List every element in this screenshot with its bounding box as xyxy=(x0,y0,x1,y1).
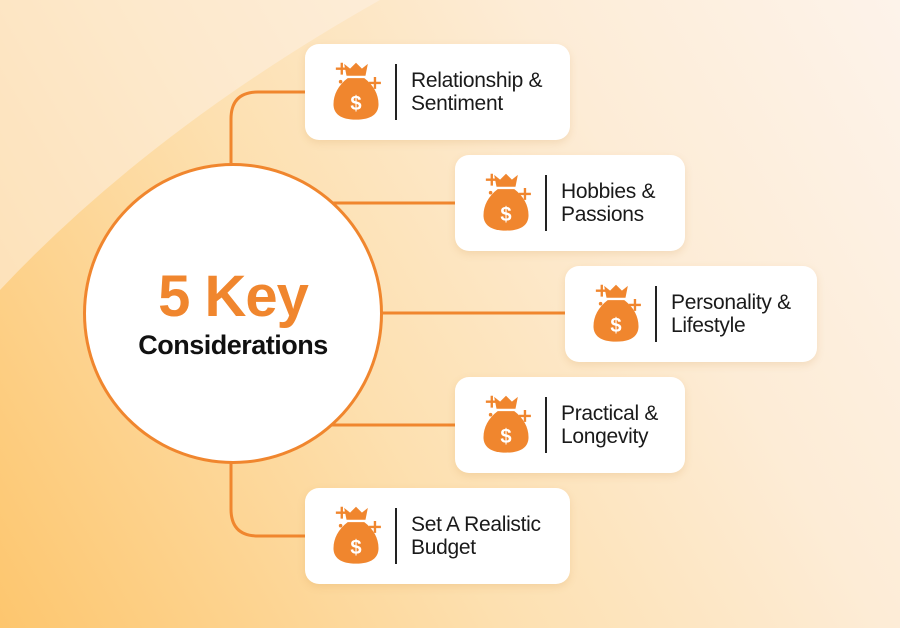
card 2 xyxy=(455,155,685,251)
icon: money bag: $ xyxy=(350,537,362,559)
title: 5 Key xyxy=(158,264,308,329)
label xyxy=(411,69,542,115)
subtitle: Considerations xyxy=(138,330,328,360)
label: Hobbies & xyxy=(561,180,655,203)
card 3 xyxy=(565,266,817,362)
label xyxy=(561,180,656,226)
icon: money bag xyxy=(334,62,381,120)
card 4 xyxy=(455,377,685,473)
label: Longevity xyxy=(561,425,648,448)
label: Sentiment xyxy=(411,92,503,115)
icon: money bag xyxy=(594,284,641,342)
icon: money bag: $ xyxy=(350,93,362,115)
label: Lifestyle xyxy=(671,314,745,337)
label: Passions xyxy=(561,203,644,226)
card 1 xyxy=(305,44,570,140)
label: Relationship & xyxy=(411,69,542,92)
label: Budget xyxy=(411,536,476,559)
icon: money bag: $ xyxy=(500,426,512,448)
icon: money bag: $ xyxy=(610,315,622,337)
label xyxy=(411,513,541,559)
icon: money bag xyxy=(334,506,381,564)
central circle xyxy=(83,163,383,464)
icon: money bag xyxy=(484,174,531,231)
icon: money bag: $ xyxy=(500,204,512,226)
label xyxy=(561,402,658,448)
label: Set A Realistic xyxy=(411,513,541,536)
card 5 xyxy=(305,488,570,584)
label xyxy=(671,291,791,337)
label: Practical & xyxy=(561,402,658,425)
icon: money bag xyxy=(484,396,531,453)
label: Personality & xyxy=(671,291,791,314)
